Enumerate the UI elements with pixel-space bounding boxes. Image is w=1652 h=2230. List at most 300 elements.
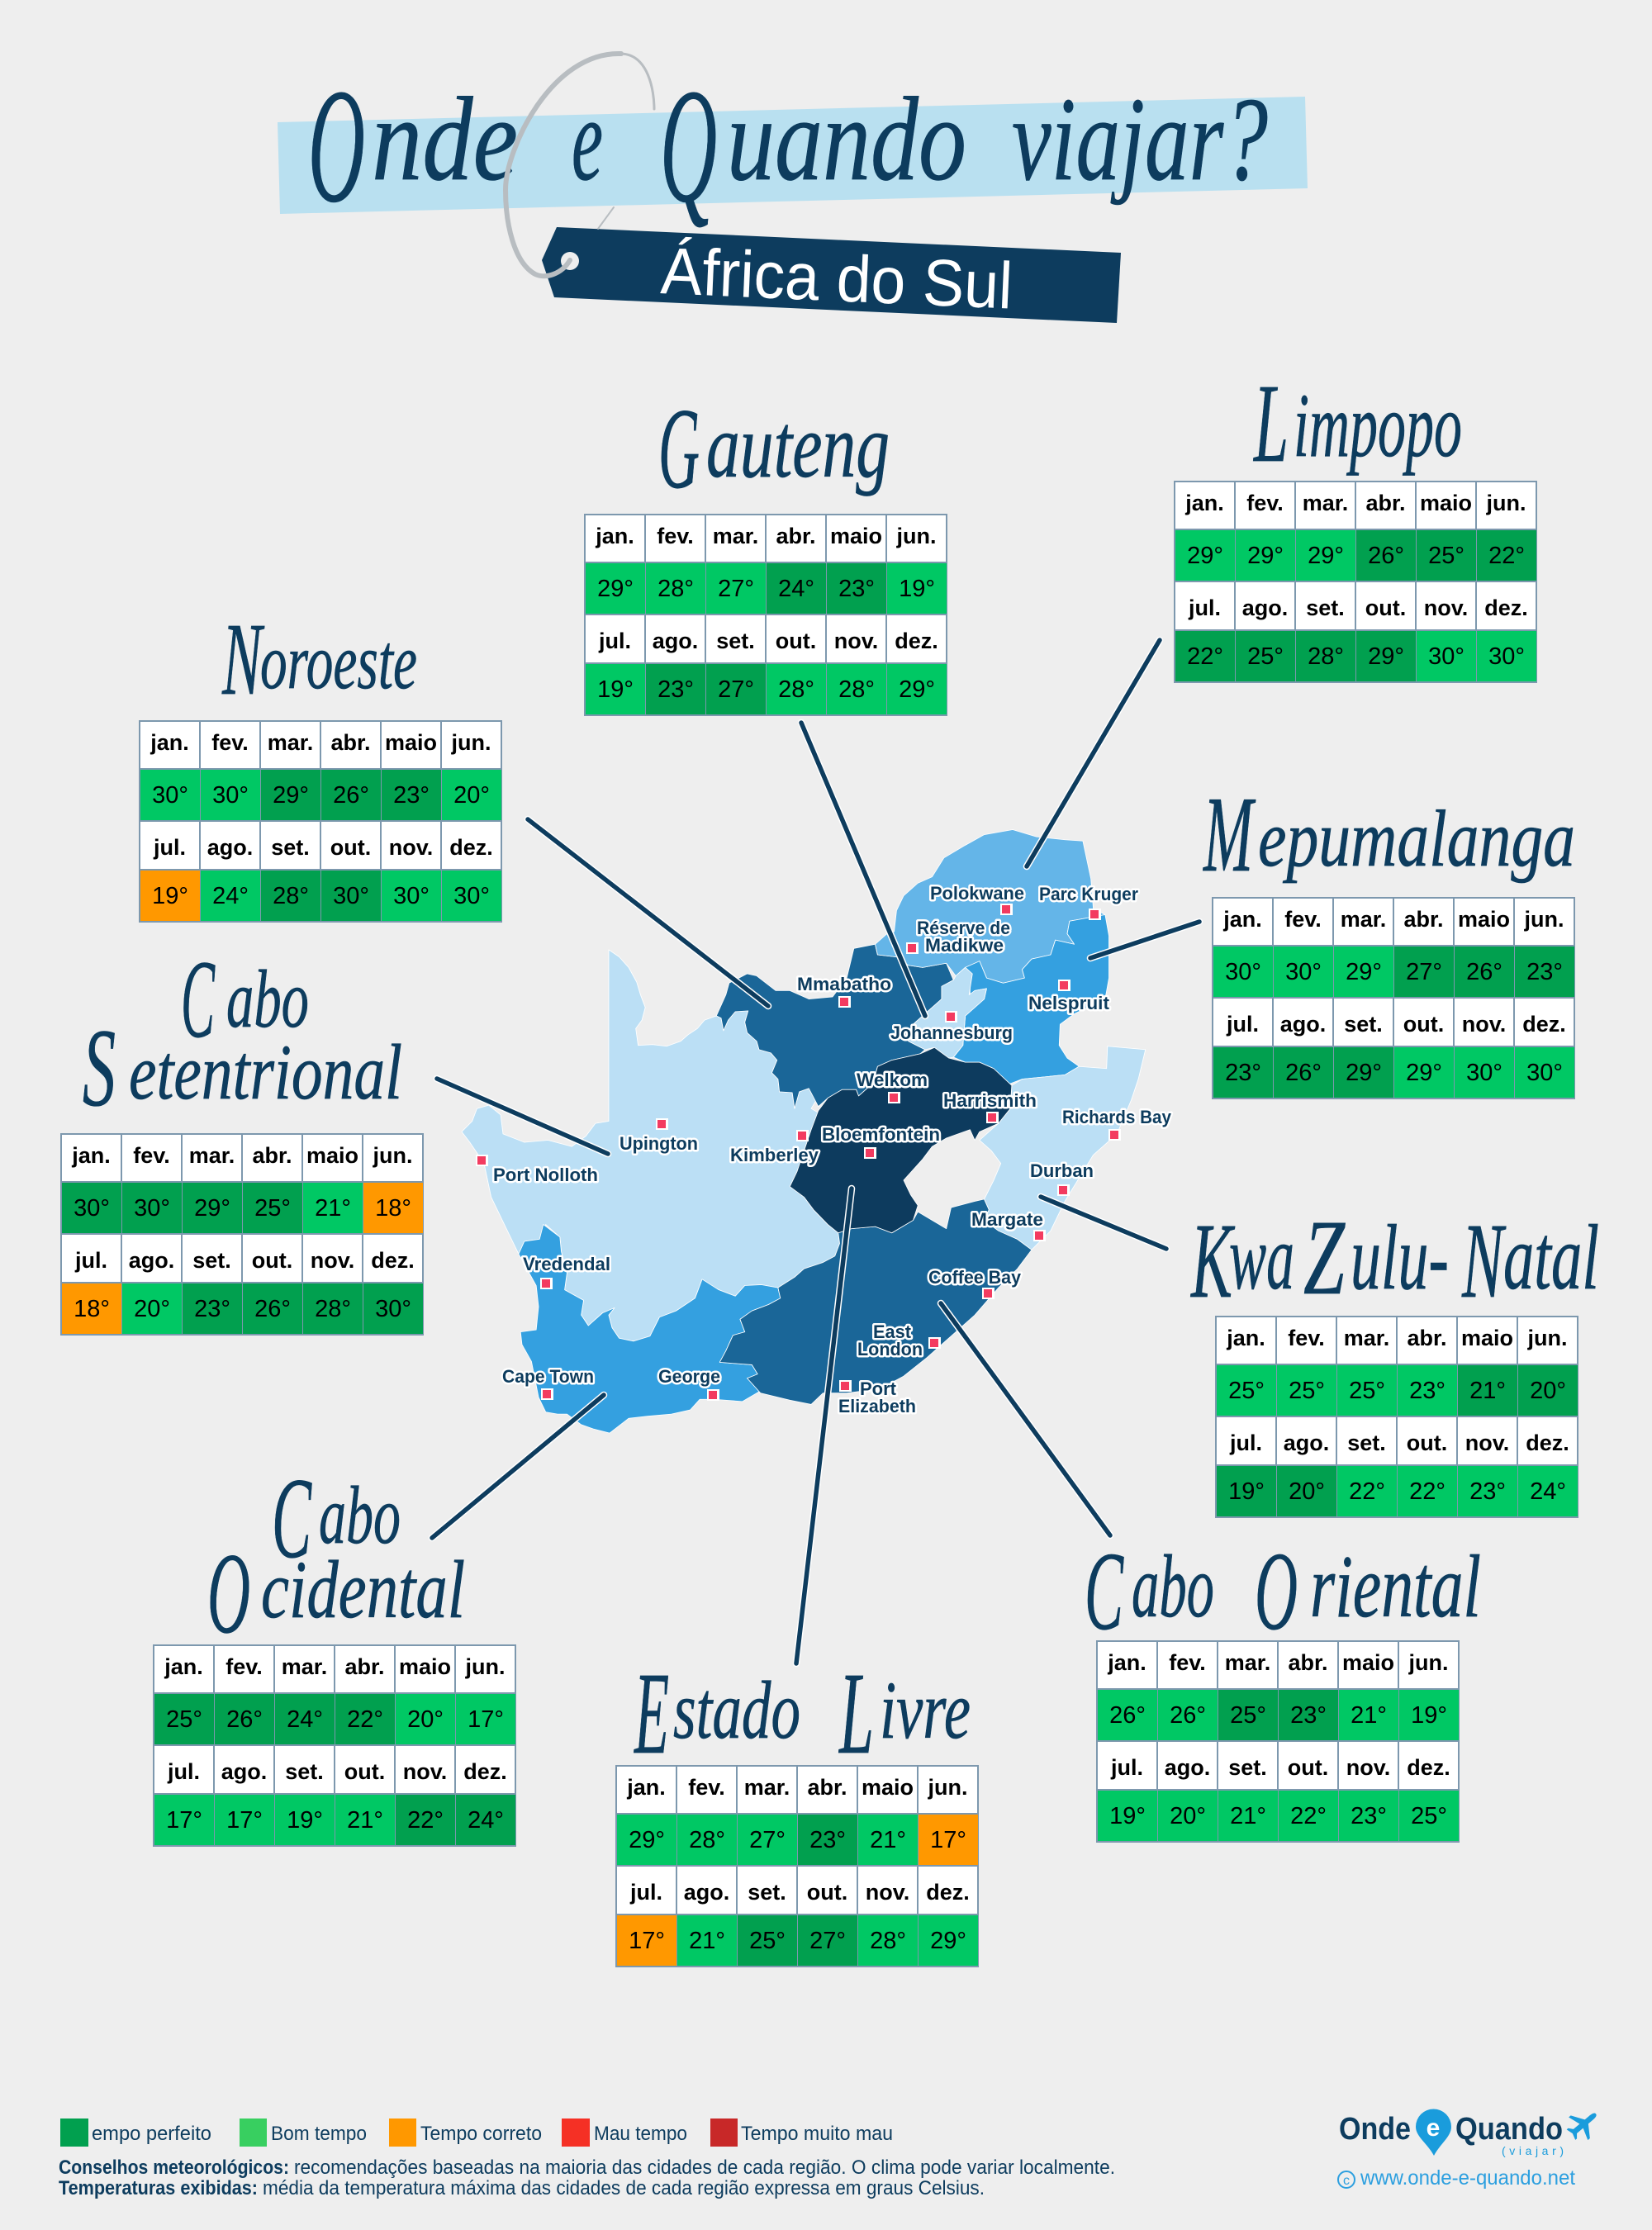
table: KwaZulu-Natal: jan. (1227, 1326, 1265, 1350)
table: Estado Livre: 17° (629, 1928, 665, 1954)
table: Limpopo: maio (1420, 491, 1472, 515)
table: Gauteng (584, 514, 947, 716)
table: KwaZulu-Natal: 19° (1228, 1478, 1265, 1505)
table: Gauteng: dez. (895, 628, 938, 652)
heading: Cabo Ocidental: abo (319, 1469, 401, 1561)
table: Mepumalanga: abr. (1403, 907, 1444, 932)
table: KwaZulu-Natal: 20° (1530, 1378, 1566, 1404)
city: Upington: Upington (620, 1133, 698, 1154)
table: Estado Livre: 17° (930, 1827, 966, 1853)
table: Mepumalanga: set. (1344, 1011, 1383, 1036)
table: KwaZulu-Natal: 23° (1409, 1378, 1446, 1404)
table: Estado Livre: 28° (689, 1827, 725, 1853)
table: Gauteng: nov. (834, 628, 878, 652)
table: Cabo Ocidental: nov. (403, 1759, 447, 1784)
table: Cabo Oriental: jul. (1111, 1754, 1143, 1779)
table: Cabo Oriental: 19° (1109, 1803, 1146, 1829)
city: Mmabatho: Mmabatho (797, 974, 891, 994)
table: Limpopo: abr. (1365, 491, 1406, 515)
table: Cabo Setentrional: abr. (252, 1143, 292, 1168)
table: Estado Livre: 27° (809, 1928, 846, 1954)
table: Cabo Setentrional: 26° (254, 1296, 291, 1322)
table: Estado Livre: mar. (744, 1775, 790, 1800)
city: Bloemfontein: Bloemfontein (822, 1124, 940, 1145)
table: Cabo Oriental: out. (1288, 1754, 1328, 1779)
table: Cabo Ocidental: 22° (407, 1807, 444, 1834)
table: Cabo Oriental: 20° (1170, 1803, 1206, 1829)
table: Cabo Oriental: set. (1228, 1754, 1267, 1779)
region: Gauteng (909, 967, 986, 1058)
table: Noroeste: 30° (152, 782, 188, 809)
table: Cabo Oriental: ago. (1165, 1754, 1210, 1779)
table: Noroeste: ago. (207, 834, 253, 859)
legend item: Tempo correto: Tempo correto (420, 2123, 542, 2145)
table: Noroeste: abr. (330, 730, 371, 755)
table: Noroeste: 23° (393, 782, 430, 809)
table: Cabo Setentrional: set. (192, 1247, 231, 1272)
title: uando (727, 74, 966, 206)
map of South Africa (462, 829, 1146, 1433)
table: Limpopo: 26° (1368, 543, 1404, 569)
table: Cabo Oriental: 23° (1290, 1702, 1327, 1729)
city: Johannesburg: Johannesburg (890, 1022, 1013, 1043)
table: Estado Livre: dez. (926, 1880, 970, 1905)
table: Cabo Ocidental: dez. (463, 1759, 507, 1784)
leader: KwaZulu-Natal (1041, 1197, 1166, 1249)
table: KwaZulu-Natal: mar. (1344, 1326, 1389, 1350)
heading: Cabo Oriental: riental (1310, 1538, 1481, 1636)
footnotes: Temperaturas exibidas: (59, 2177, 258, 2199)
table: Cabo Ocidental: fev. (225, 1654, 263, 1679)
table: Noroeste: out. (330, 834, 371, 859)
table: KwaZulu-Natal: 22° (1409, 1478, 1446, 1505)
table: Limpopo: ago. (1242, 595, 1288, 619)
title: e (572, 74, 603, 206)
logo: Onde e Quando: (viajar) (1502, 2144, 1564, 2157)
heading: Estado Livre: ivre (880, 1664, 971, 1756)
table: Cabo Oriental: mar. (1225, 1650, 1270, 1675)
table: Cabo Setentrional: 18° (74, 1296, 110, 1322)
table: Mepumalanga: 26° (1466, 959, 1502, 985)
table: Mepumalanga: jun. (1525, 907, 1564, 932)
heading: KwaZulu-Natal: Z (1303, 1198, 1346, 1317)
logo: Onde e Quando: Onde (1339, 2112, 1411, 2147)
region: Cabo Oriental (719, 1199, 1032, 1404)
footnotes: Conselhos meteorológicos: (59, 2156, 289, 2179)
table: Cabo Oriental: 19° (1411, 1702, 1447, 1729)
table: Mepumalanga: fev. (1284, 907, 1322, 932)
table: Noroeste: 30° (393, 883, 430, 909)
table: KwaZulu-Natal: 23° (1469, 1478, 1506, 1505)
table: Gauteng: 23° (657, 676, 694, 703)
city: Richards Bay: Richards Bay (1062, 1107, 1172, 1127)
table: Cabo Oriental: 25° (1230, 1702, 1266, 1729)
table: Gauteng: set. (716, 628, 755, 652)
table: Gauteng: 28° (838, 676, 875, 703)
table: Cabo Ocidental: jul. (168, 1759, 200, 1784)
table: Gauteng: 28° (778, 676, 814, 703)
table: KwaZulu-Natal: abr. (1407, 1326, 1447, 1350)
region: Cabo Ocidental (519, 1225, 781, 1433)
table: Cabo Ocidental: 19° (287, 1807, 323, 1834)
heading: Cabo Setentrional (83, 938, 402, 1130)
logo: Onde e Quando: Quando (1455, 2112, 1563, 2147)
table: KwaZulu-Natal: 25° (1289, 1378, 1325, 1404)
table: Limpopo: 22° (1488, 543, 1525, 569)
title: nde (372, 74, 518, 206)
table: Gauteng: jun. (897, 524, 937, 548)
heading: KwaZulu-Natal: K (1190, 1202, 1236, 1321)
legend item: Tempo muito mau (710, 2118, 893, 2147)
table: Noroeste: 20° (453, 782, 490, 809)
footnotes (59, 2156, 1115, 2199)
city: Port Nolloth (476, 1155, 598, 1185)
city: Nelspruit (1028, 980, 1110, 1013)
table: KwaZulu-Natal (1215, 1316, 1578, 1518)
table: Cabo Ocidental: set. (285, 1759, 324, 1784)
table: Estado Livre: 29° (629, 1827, 665, 1853)
table: Noroeste: 30° (333, 883, 369, 909)
table: Cabo Setentrional (60, 1133, 424, 1336)
table: Estado Livre: jul. (630, 1880, 662, 1905)
website credit: www.onde-e-quando.net (1360, 2166, 1575, 2190)
table: Mepumalanga: out. (1403, 1011, 1444, 1036)
table: Mepumalanga: jan. (1223, 907, 1262, 932)
table: Noroeste: 28° (273, 883, 309, 909)
table: Cabo Ocidental: out. (344, 1759, 385, 1784)
table: Mepumalanga: 30° (1526, 1060, 1563, 1086)
icon: plane (1561, 2103, 1606, 2146)
city: Réserve de Madikwe (906, 918, 1010, 956)
heading: KwaZulu-Natal: atal (1503, 1207, 1599, 1309)
city: Port Elizabeth: Elizabeth (838, 1396, 916, 1416)
table: Estado Livre: 27° (749, 1827, 786, 1853)
table: Cabo Ocidental: 24° (468, 1807, 504, 1834)
city: Welkom: Welkom (857, 1070, 928, 1090)
city: Port Nolloth: Port Nolloth (493, 1165, 598, 1185)
legend item: Mau tempo (562, 2118, 687, 2147)
table: Cabo Setentrional: dez. (371, 1247, 415, 1272)
heading: Cabo Setentrional: abo (226, 953, 309, 1045)
table: Mepumalanga: 30° (1225, 959, 1261, 985)
heading: Estado Livre: stado (673, 1664, 800, 1756)
table: Cabo Ocidental: 24° (287, 1706, 323, 1733)
city: Richards Bay (1062, 1107, 1172, 1141)
table: Noroeste: maio (385, 730, 437, 755)
table: Mepumalanga: 27° (1406, 959, 1442, 985)
table: Cabo Ocidental: mar. (282, 1654, 327, 1679)
table: Limpopo: 30° (1488, 643, 1525, 670)
table: Noroeste: jan. (150, 730, 189, 755)
table: KwaZulu-Natal: 24° (1530, 1478, 1566, 1505)
leader: Cabo Ocidental (432, 1395, 604, 1538)
city: East London: East (873, 1321, 912, 1342)
legend item: Tempo correto (389, 2118, 542, 2147)
table: Cabo Setentrional: 28° (315, 1296, 351, 1322)
city markers and labels (476, 883, 1172, 1416)
table: Noroeste: 26° (333, 782, 369, 809)
city: Durban: Durban (1030, 1160, 1094, 1181)
table: Cabo Setentrional: jul. (75, 1247, 107, 1272)
table: Cabo Setentrional: ago. (129, 1247, 174, 1272)
subtitle: África do Sul (659, 234, 1014, 323)
table: Mepumalanga: ago. (1280, 1011, 1326, 1036)
table: Estado Livre: ago. (684, 1880, 729, 1905)
city: Port Elizabeth (838, 1378, 916, 1416)
heading: KwaZulu-Natal: wa (1229, 1207, 1294, 1309)
city: Kimberley: Kimberley (730, 1145, 819, 1165)
table: Estado Livre (615, 1765, 979, 1967)
city: Welkom (857, 1070, 928, 1103)
city: Durban (1030, 1160, 1094, 1196)
table: Noroeste: mar. (268, 730, 313, 755)
table: Cabo Oriental: jan. (1108, 1650, 1146, 1675)
leader: Estado Livre (796, 1189, 852, 1663)
table: Cabo Oriental (1096, 1640, 1460, 1843)
website credit: c (1343, 2174, 1350, 2188)
table: KwaZulu-Natal: 20° (1289, 1478, 1325, 1505)
table: Cabo Oriental: 21° (1351, 1702, 1387, 1729)
table: Noroeste: 19° (152, 883, 188, 909)
table: Cabo Ocidental: 21° (347, 1807, 383, 1834)
leader: Cabo Setentrional (437, 1079, 608, 1154)
table: Estado Livre: 28° (870, 1928, 906, 1954)
title: viajar? (1012, 74, 1268, 206)
region: KwaZulu-Natal (980, 1046, 1146, 1250)
table: KwaZulu-Natal: set. (1347, 1431, 1386, 1455)
table: Estado Livre: abr. (807, 1775, 847, 1800)
table: Estado Livre: 29° (930, 1928, 966, 1954)
logo: Onde e Quando (1339, 2103, 1606, 2157)
table: Estado Livre: set. (748, 1880, 786, 1905)
heading: Estado Livre: L (838, 1648, 874, 1778)
tag hole (561, 252, 579, 270)
table: Cabo Oriental: 26° (1170, 1702, 1206, 1729)
heading: Cabo Ocidental: cidental (261, 1544, 465, 1635)
region: Limpopo (876, 829, 1105, 983)
table: Estado Livre: jan. (627, 1775, 666, 1800)
table: Cabo Ocidental: 26° (226, 1706, 263, 1733)
table: Estado Livre: out. (807, 1880, 847, 1905)
table: Gauteng: 24° (778, 576, 814, 602)
region: Mepumalanga (953, 915, 1109, 1085)
legend item: Tempo perfeito (60, 2118, 211, 2147)
label tag (542, 227, 1121, 323)
table: Noroeste: nov. (389, 834, 433, 859)
heading: Cabo Oriental: abo (1132, 1538, 1214, 1636)
table: Cabo Ocidental (153, 1644, 516, 1847)
table: Mepumalanga: 23° (1526, 959, 1563, 985)
table: Cabo Setentrional: 18° (375, 1195, 411, 1222)
table: Estado Livre: 23° (809, 1827, 846, 1853)
table: Noroeste: jul. (154, 834, 186, 859)
table: Limpopo: jul. (1189, 595, 1221, 619)
heading: Cabo Setentrional: C (181, 938, 216, 1061)
heading: Cabo Oriental: C (1085, 1530, 1124, 1654)
table: Estado Livre: fev. (688, 1775, 725, 1800)
table: Mepumalanga: maio (1458, 907, 1510, 932)
leader: Noroeste (528, 819, 768, 1006)
table: Limpopo (1174, 481, 1537, 683)
region: Estado Livre (790, 1047, 1012, 1233)
leader: Gauteng (801, 723, 925, 1016)
table: Gauteng: 19° (597, 676, 634, 703)
heading: Limpopo: impopo (1294, 375, 1462, 476)
heading: Gauteng: auteng (706, 396, 890, 496)
table: Limpopo: 25° (1428, 543, 1464, 569)
heading: KwaZulu-Natal: N (1461, 1202, 1507, 1321)
table: Cabo Setentrional: jan. (72, 1143, 111, 1168)
table: Limpopo: 25° (1247, 643, 1284, 670)
table: Mepumalanga: 30° (1466, 1060, 1502, 1086)
title band (278, 97, 1308, 214)
city: Parc Kruger (1039, 884, 1138, 920)
table: Cabo Setentrional: 30° (74, 1195, 110, 1222)
city: Johannesburg (890, 1011, 1013, 1043)
table: Mepumalanga: 29° (1346, 959, 1382, 985)
table: Cabo Setentrional: 20° (134, 1296, 170, 1322)
table: Cabo Oriental: 21° (1230, 1803, 1266, 1829)
table: KwaZulu-Natal: 22° (1349, 1478, 1385, 1505)
table: Estado Livre: 21° (870, 1827, 906, 1853)
city: George: George (658, 1366, 720, 1387)
heading: Cabo Ocidental: C (272, 1454, 312, 1582)
table: KwaZulu-Natal: ago. (1284, 1431, 1329, 1455)
city: Polokwane (930, 883, 1024, 915)
city: Vredendal (523, 1254, 610, 1289)
city: Margate (971, 1209, 1046, 1241)
footnotes: média da temperatura máxima das cidades de cada região expressa em graus Celsius. (263, 2177, 985, 2199)
table: Limpopo: 29° (1187, 543, 1223, 569)
heading: Mepumalanga: epumalanga (1258, 795, 1575, 883)
legend item: Tempo muito mau: Tempo muito mau (741, 2123, 893, 2145)
city: Réserve de Madikwe: Madikwe (925, 935, 1004, 956)
table: Cabo Ocidental: jan. (164, 1654, 203, 1679)
table: Cabo Ocidental: maio (399, 1654, 451, 1679)
heading: Cabo Setentrional: S (83, 1007, 116, 1130)
city: Parc Kruger: Parc Kruger (1039, 884, 1138, 904)
table: Cabo Ocidental: 17° (226, 1807, 263, 1834)
table: Cabo Setentrional: 21° (315, 1195, 351, 1222)
table: Noroeste: dez. (449, 834, 493, 859)
table: Cabo Setentrional: 25° (254, 1195, 291, 1222)
city: Cape Town (502, 1366, 594, 1400)
table: Cabo Ocidental: 20° (407, 1706, 444, 1733)
table: Gauteng: 29° (597, 576, 634, 602)
title: Q (660, 55, 717, 236)
table: Estado Livre: jun. (928, 1775, 968, 1800)
table: Limpopo: jun. (1487, 491, 1526, 515)
legend item: Tempo perfeito: empo perfeito (92, 2123, 211, 2145)
table: Cabo Oriental: jun. (1409, 1650, 1449, 1675)
leader: Mepumalanga (1090, 922, 1199, 958)
heading: Cabo Setentrional: etentrional (129, 1028, 402, 1116)
table: Limpopo: 29° (1247, 543, 1284, 569)
table: Limpopo: out. (1365, 595, 1406, 619)
table: Cabo Setentrional: 23° (194, 1296, 230, 1322)
table: Noroeste: set. (271, 834, 310, 859)
region: Noroeste (716, 944, 953, 1108)
table: Estado Livre: 25° (749, 1928, 786, 1954)
tag string (506, 54, 654, 276)
legend (60, 2118, 893, 2147)
table: KwaZulu-Natal: fev. (1288, 1326, 1325, 1350)
table: Mepumalanga: mar. (1341, 907, 1386, 932)
table: Gauteng: abr. (776, 524, 816, 548)
table: Cabo Ocidental: 17° (166, 1807, 202, 1834)
table: KwaZulu-Natal: dez. (1526, 1431, 1569, 1455)
table: Mepumalanga: 30° (1285, 959, 1322, 985)
table: Gauteng: jul. (599, 628, 631, 652)
table: Cabo Ocidental: 17° (468, 1706, 504, 1733)
table: Mepumalanga: 29° (1346, 1060, 1382, 1086)
table: Limpopo: 29° (1368, 643, 1404, 670)
table: Cabo Ocidental: 22° (347, 1706, 383, 1733)
table: Limpopo: nov. (1424, 595, 1468, 619)
table: Gauteng: mar. (713, 524, 758, 548)
region: Cabo Setentrional (462, 950, 840, 1341)
table: KwaZulu-Natal: 25° (1349, 1378, 1385, 1404)
heading: Cabo Oriental: O (1255, 1530, 1298, 1654)
table: Cabo Oriental: 26° (1109, 1702, 1146, 1729)
table: Cabo Oriental: nov. (1346, 1754, 1390, 1779)
table: Limpopo: dez. (1484, 595, 1528, 619)
table: Gauteng: jan. (596, 524, 634, 548)
heading: Mepumalanga: M (1203, 775, 1256, 894)
table: Cabo Setentrional: mar. (189, 1143, 235, 1168)
table: Limpopo: set. (1306, 595, 1345, 619)
table: Cabo Ocidental: jun. (466, 1654, 506, 1679)
legend item: Mau tempo: Mau tempo (594, 2123, 687, 2145)
table: Mepumalanga: dez. (1522, 1011, 1566, 1036)
table: Limpopo: 28° (1308, 643, 1344, 670)
table: Limpopo: jan. (1185, 491, 1224, 515)
table: Gauteng: fev. (657, 524, 694, 548)
table: Mepumalanga: 26° (1285, 1060, 1322, 1086)
heading: Gauteng: G (658, 385, 700, 513)
city: East London (857, 1321, 941, 1359)
city: Réserve de Madikwe: Réserve de (917, 918, 1010, 938)
table: Limpopo: 22° (1187, 643, 1223, 670)
table: Cabo Setentrional: fev. (133, 1143, 170, 1168)
leader: Cabo Oriental (941, 1303, 1110, 1535)
city: Harrismith: Harrismith (943, 1090, 1037, 1111)
table: Limpopo: mar. (1303, 491, 1348, 515)
heading: Cabo Ocidental (207, 1454, 465, 1658)
table: KwaZulu-Natal: nov. (1465, 1431, 1509, 1455)
city: Nelspruit: Nelspruit (1028, 993, 1110, 1013)
table: Noroeste: 30° (453, 883, 490, 909)
table: Mepumalanga: 23° (1225, 1060, 1261, 1086)
city: Port Elizabeth: Port (860, 1378, 897, 1399)
city: Margate: Margate (971, 1209, 1043, 1230)
icon: location pin: e (1427, 2114, 1440, 2142)
table: Estado Livre: 21° (689, 1928, 725, 1954)
table: Noroeste: jun. (451, 730, 491, 755)
heading: Estado Livre: E (634, 1648, 669, 1778)
table: Cabo Setentrional: out. (252, 1247, 292, 1272)
heading: Noroeste: oroeste (260, 618, 417, 705)
table: Gauteng: 29° (899, 676, 935, 703)
table: Cabo Oriental: 23° (1351, 1803, 1387, 1829)
city: Upington (620, 1118, 698, 1154)
table: KwaZulu-Natal: 21° (1469, 1378, 1506, 1404)
heading: Limpopo: L (1253, 362, 1289, 486)
table: Gauteng: 28° (657, 576, 694, 602)
table: Cabo Oriental: maio (1342, 1650, 1394, 1675)
table: Cabo Setentrional: 30° (375, 1296, 411, 1322)
table: Cabo Ocidental: 25° (166, 1706, 202, 1733)
